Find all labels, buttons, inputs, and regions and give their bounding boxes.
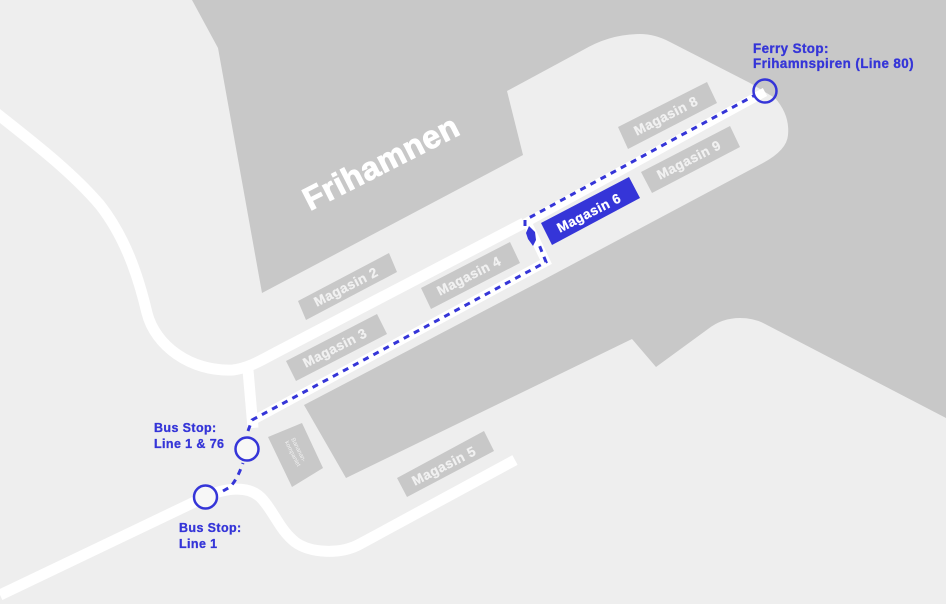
walking route <box>223 95 755 491</box>
building: Magasin 8: Magasin 8 <box>631 93 700 139</box>
building: Magasin 5 <box>397 431 494 497</box>
building: Magasin 3 <box>286 314 387 381</box>
icon: entrance marker <box>526 226 536 246</box>
building: Magasin 2 <box>298 253 397 320</box>
building: small terminal <box>268 423 323 487</box>
building: Magasin 3: Magasin 3 <box>300 325 369 371</box>
water area <box>192 0 946 478</box>
building: Magasin 4: Magasin 4 <box>434 253 503 299</box>
label: bus stop line 1 and 76: Bus Stop: <box>154 421 217 435</box>
building: Magasin 4 <box>421 242 520 309</box>
title: Frihamnen: Frihamnen <box>297 108 465 217</box>
bus stop line 1 marker <box>194 486 217 508</box>
building: Magasin 8 <box>618 82 717 149</box>
building: small terminal: Bananan- <box>289 437 306 463</box>
label: bus stop line 1: Line 1 <box>179 537 218 551</box>
label: ferry stop: Ferry Stop: <box>753 41 829 56</box>
building: Magasin 9: Magasin 9 <box>654 137 723 183</box>
building: Magasin 2: Magasin 2 <box>311 264 380 310</box>
label: bus stop line 1 and 76: Line 1 & 76 <box>154 437 224 451</box>
building: Magasin 9 <box>641 126 740 193</box>
building: Magasin 5: Magasin 5 <box>409 443 478 489</box>
bus stop line 1 and 76 marker <box>236 438 258 460</box>
roads <box>0 92 765 595</box>
building: Magasin 6 highlighted <box>541 177 640 245</box>
building: Magasin 6 highlighted: Magasin 6 <box>554 190 623 236</box>
building: small terminal: kompaniet <box>283 440 301 468</box>
label: bus stop line 1: Bus Stop: <box>179 521 242 535</box>
label: ferry stop: Frihamnspiren (Line 80) <box>753 56 914 71</box>
ferry stop marker <box>754 80 776 102</box>
